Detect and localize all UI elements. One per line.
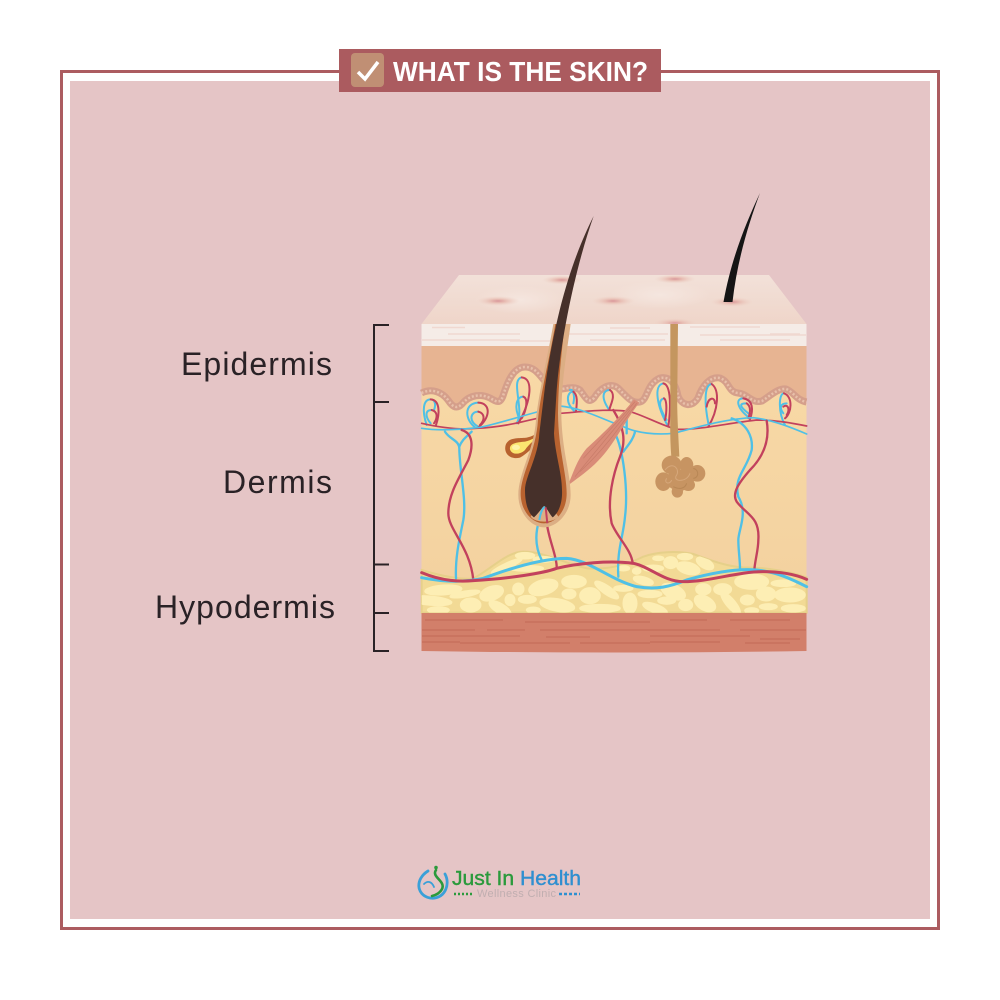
- vertical blue vessels: [445, 417, 752, 578]
- dermis layer with wavy boundary: [422, 367, 806, 580]
- capillary loops: red: [431, 377, 790, 427]
- layer labels: [155, 346, 335, 625]
- label: Epidermis: Epidermis: [181, 346, 332, 382]
- logo tagline: Wellness Clinic: [477, 888, 556, 900]
- second hair: [724, 193, 760, 302]
- frame: outer border: [62, 72, 938, 928]
- deep blue vessel: [422, 558, 807, 588]
- basal cell band: [422, 367, 806, 407]
- logo dots: [454, 893, 580, 895]
- brackets: [374, 325, 389, 651]
- background panel: [70, 81, 930, 919]
- stratum corneum band: [422, 324, 806, 346]
- title text: WHAT IS THE SKIN?: [393, 56, 648, 87]
- follicle sheath: outer: [518, 324, 571, 527]
- fat cells: [408, 553, 805, 618]
- label: Hypodermis: Hypodermis: [155, 589, 335, 625]
- capillary loops: blue: [424, 377, 787, 427]
- deep red vessel: [422, 562, 807, 582]
- papilla vessels: [539, 507, 545, 520]
- skin cross-section diagram: [408, 193, 807, 652]
- arrector pili muscle: [568, 399, 639, 486]
- hair follicle with hair shaft: [518, 216, 594, 527]
- vertical red vessels: [448, 410, 768, 580]
- label: Dermis: Dermis: [223, 464, 332, 500]
- follicle sheath: brown: [521, 324, 567, 523]
- hair shaft: [525, 216, 594, 517]
- blood vessels and capillary loops: [422, 377, 807, 588]
- skin surface with pores: [422, 274, 806, 328]
- icon: check mark: [351, 53, 384, 87]
- hypodermis fat layer: [408, 552, 807, 618]
- logo wordmark: Just In Health: [452, 868, 581, 890]
- logo: Just In Health Wellness Clinic: [419, 866, 581, 900]
- title banner: [339, 49, 661, 92]
- muscle layer: [422, 613, 806, 652]
- icon: logo mark: [419, 866, 447, 898]
- sweat duct and gland: [655, 324, 705, 498]
- epidermis layer: [422, 346, 806, 416]
- sebaceous gland: [505, 431, 542, 458]
- papilla: [531, 500, 558, 522]
- upper vessel plexus: [422, 410, 807, 429]
